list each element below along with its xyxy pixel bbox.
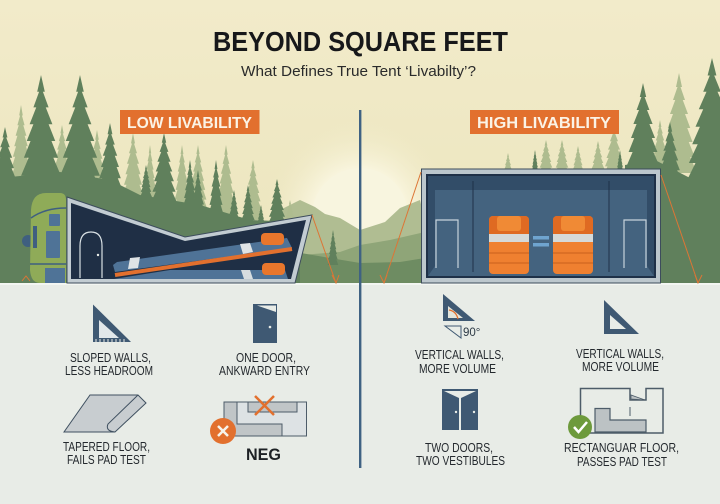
guy line right of low tent [312,215,339,283]
mid green hill [300,232,425,284]
icon: backpack [22,193,66,283]
label: vertical walls 1: VERTICAL WALLS, [415,347,504,362]
icon: tapered floor [64,395,146,432]
label: two doors [416,440,505,468]
icon: one door [253,304,277,343]
label: vertical walls 1: MORE VOLUME [419,361,496,376]
dark forest and trees right [531,58,720,284]
label: vertical walls 2: VERTICAL WALLS, [576,346,664,361]
label: tapered floor: FAILS PAD TEST [67,452,146,467]
icon: two doors [442,389,478,430]
label: sloped walls: LESS HEADROOM [65,363,153,378]
label: tapered floor: TAPERED FLOOR, [63,439,150,454]
equals mark between bags [533,236,549,246]
label: NEG: NEG [246,445,281,464]
icon: set square with 90 degrees [443,294,480,339]
label: two doors: TWO VESTIBULES [416,453,505,468]
light treeline right [502,73,697,185]
label: vertical walls 2: MORE VOLUME [582,359,659,374]
center divider [359,110,361,468]
dark treeline left [0,75,338,265]
label: vertical walls 2 [576,346,664,374]
upper sleeping pad [113,233,292,272]
label: rectangular floor: RECTANGUAR FLOOR, [564,440,679,455]
lower sleeping pad [114,263,288,279]
label: one door: ONE DOOR, [236,350,296,365]
low green ground [295,252,425,284]
right sleeping bag [553,216,593,274]
title: BEYOND SQUARE FEET [213,26,508,57]
subtitle: What Defines True Tent ‘Livabilty’? [241,63,476,80]
left sleeping bag [489,216,529,274]
ground panel [0,284,720,504]
distant light hills [280,200,440,284]
badge: high livability [470,110,619,134]
guy lines of high tent [380,172,702,283]
right door [624,220,646,268]
label: rectangular floor [564,440,679,469]
label: one door [219,350,310,378]
door with arch [80,232,102,278]
label: one door: ANKWARD ENTRY [219,363,310,378]
icon: sloped set square [93,304,131,342]
left door [436,220,458,268]
label: vertical walls 1 [415,347,504,376]
label: rectangular floor: PASSES PAD TEST [577,454,667,469]
sun [265,120,455,310]
tent: high livability [422,169,660,283]
orange pad edge [115,249,292,275]
label: sloped walls [65,350,153,378]
label: sloped walls: SLOPED WALLS, [70,350,151,365]
icon: set square with 90 degrees: 90° [463,327,480,339]
background sky [0,0,720,285]
badge: high livability: HIGH LIVABILITY [477,115,611,132]
badge: low livability [120,110,260,134]
light treeline left [10,105,296,230]
label: tapered floor [63,439,150,467]
label: two doors: TWO DOORS, [425,440,493,455]
tent: low livability [67,197,312,283]
dark forest hill left [0,172,300,284]
icon: bad floor plan [210,396,306,444]
guy line low left [22,276,30,281]
icon: good floor plan [568,388,663,439]
icon: set square [604,300,639,334]
badge: low livability: LOW LIVABILITY [127,115,252,132]
